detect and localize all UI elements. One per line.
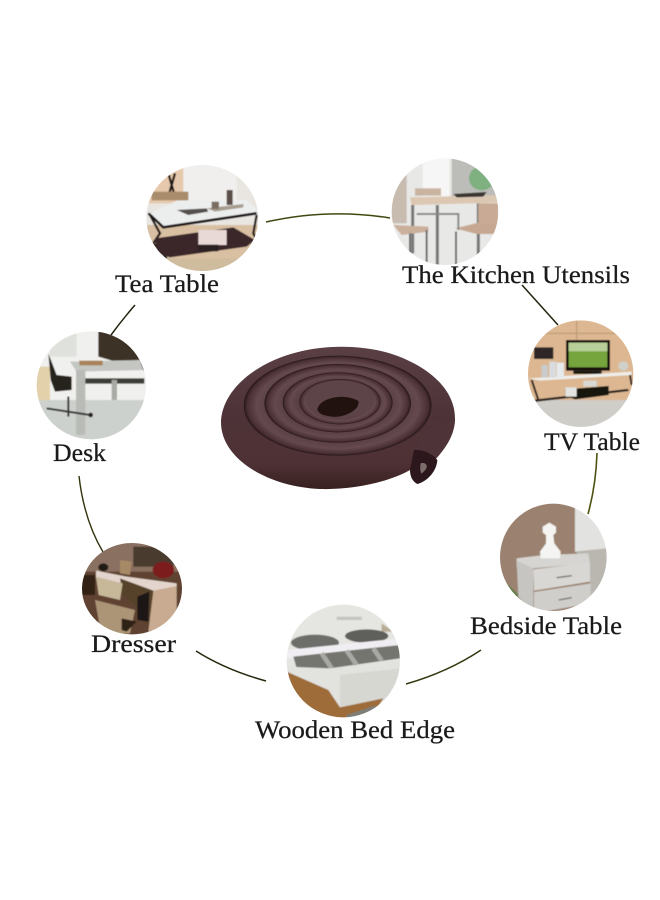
scene: desk <box>35 330 148 442</box>
connector: desk to dresser <box>79 476 103 552</box>
connector: bedside table to bed <box>406 650 481 684</box>
label: Wooden Bed Edge: Wooden Bed Edge <box>255 717 455 744</box>
connector: TV table to bedside table <box>588 453 597 514</box>
scene: wooden bed <box>285 603 402 720</box>
label: Dresser: Dresser <box>91 631 177 658</box>
coil end cross-section <box>410 418 455 484</box>
coil inner fuzzy lip <box>305 380 375 418</box>
label: Bedside Table: Bedside Table <box>470 613 622 640</box>
product: coiled brown edge guard <box>221 347 455 489</box>
connector: dresser to bed <box>196 651 266 681</box>
scene: TV table <box>527 320 635 430</box>
scene: kitchen <box>390 157 500 267</box>
label: Desk: Desk <box>53 440 107 467</box>
scene: bedside table <box>498 503 608 613</box>
connector: tea table to desk <box>111 305 135 335</box>
label: TV Table: TV Table <box>544 429 640 456</box>
connector: kitchen to TV table <box>522 285 558 325</box>
scene: tea table <box>146 165 258 271</box>
label: The Kitchen Utensils: The Kitchen Utensils <box>402 262 630 289</box>
label: Tea Table: Tea Table <box>115 271 219 298</box>
coil centre hole <box>317 397 359 417</box>
connector: tea table to kitchen <box>266 214 390 222</box>
scene: dresser <box>80 542 183 637</box>
